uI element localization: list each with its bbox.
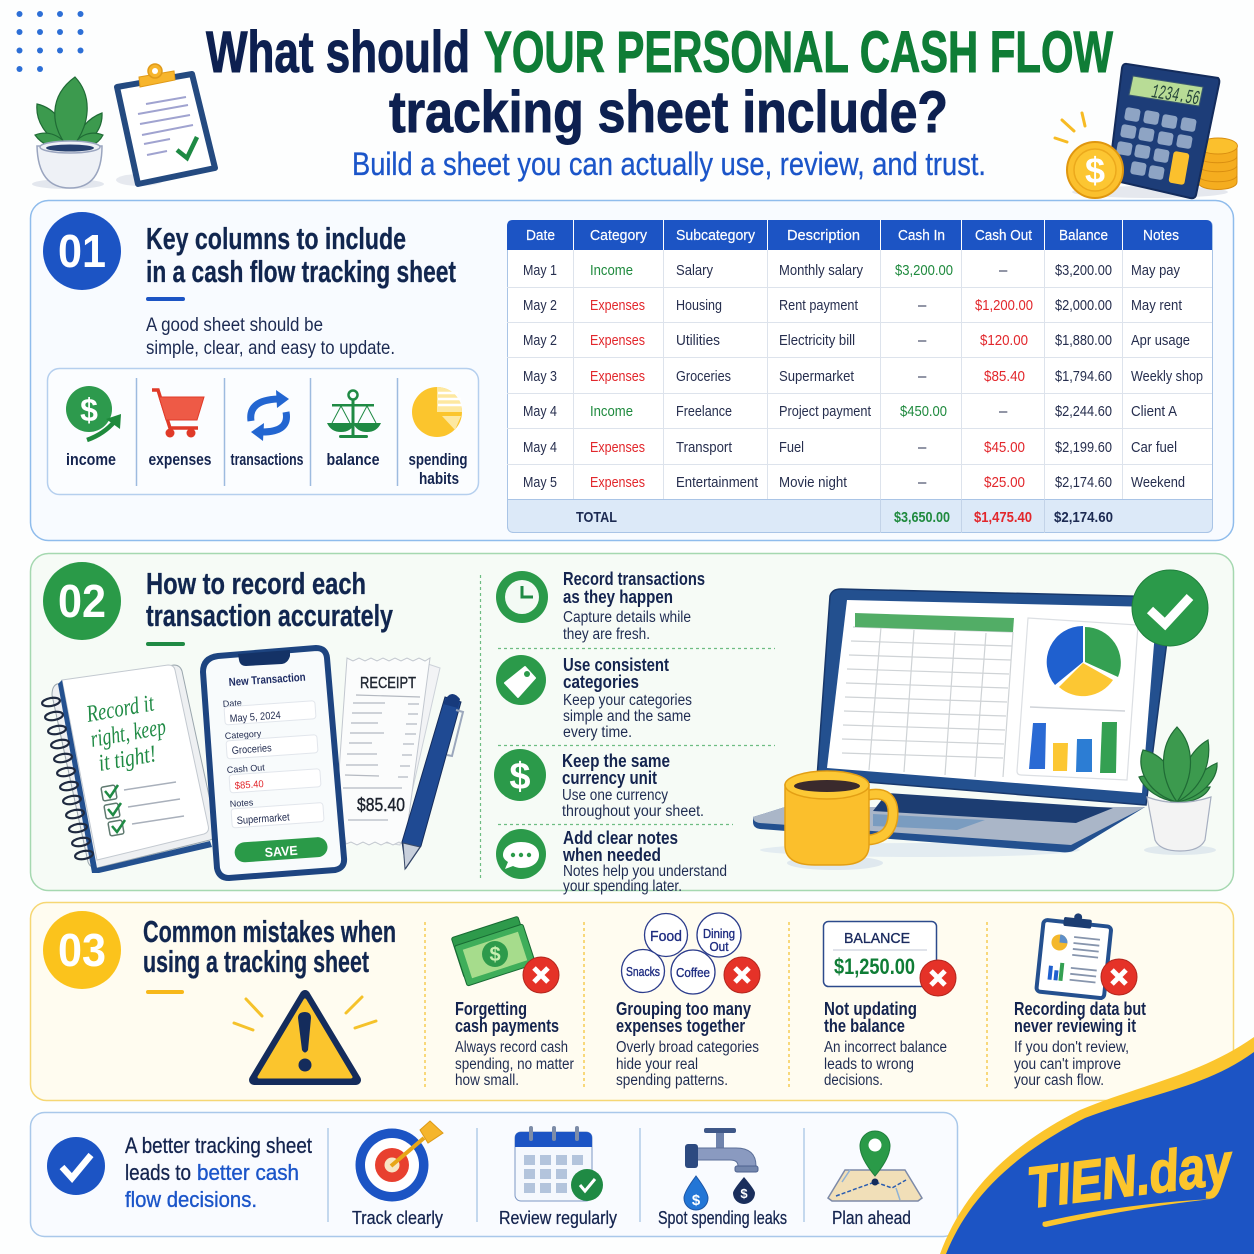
takeaway text: A better tracking sheet [125,1133,312,1158]
tip: same currency [494,749,704,820]
table row May 5: $2,174.60 [1055,474,1112,491]
icon: category bubbles: Dining [703,927,735,941]
handwritten note [84,690,168,777]
icon: calculator and coins [1055,64,1238,198]
icon: cash with red x: $ [489,944,501,966]
table row May 3: Groceries [676,368,731,385]
benefit: plan ahead: Plan ahead [832,1208,911,1228]
icon: clock [496,571,548,623]
takeaway text [125,1133,312,1212]
table row May 3 [523,368,1203,385]
mistake 2: grouping expenses: Overly broad categories [616,1039,759,1056]
illustration: phone form: Groceries [231,742,272,757]
tip: consistent categories: every time. [563,724,632,741]
table row May 4 transport [523,439,1177,456]
illustration: laptop with dashboard [753,589,1172,857]
table header: Description [787,227,860,244]
illustration: phone form [203,648,344,878]
mistake 3: not updating balance: decisions. [824,1072,883,1089]
mistake 1: forgetting cash payments: spending, no matter [455,1056,574,1073]
table row May 1: Salary [676,262,713,279]
title: What should [206,20,470,85]
icon: clipboard with checkmark [116,64,215,186]
icon: cash with red x [451,916,559,993]
table row May 4 freelance: Freelance [676,403,732,420]
illustration: phone form: $85.40 [234,779,265,792]
label: balance: balance [326,450,380,469]
tip: consistent categories: simple and the same [563,708,691,725]
illustration: phone form: Supermarket [236,811,290,827]
table row May 2 utilities: Utilities [676,332,720,349]
tip: same currency: currency unit [562,768,657,788]
table row May 2 utilities: Expenses [590,332,645,349]
icon: category bubbles [622,913,760,994]
heading: record transactions: transaction accurately [146,598,394,633]
table row May 5 [523,474,1185,491]
benefit: track clearly: Track clearly [352,1208,443,1228]
icon: spending habits pie [412,387,462,437]
benefit: spot spending leaks [658,1128,787,1228]
table row May 3: Expenses [590,368,645,385]
heading: record transactions [146,566,394,646]
table header: Cash In [898,227,945,244]
illustration: phone form: Date [222,698,242,709]
table row May 2 housing: Rent payment [779,297,859,314]
label: spending habits: habits [419,469,459,488]
illustration: phone form: May 5, 2024 [229,709,281,725]
table total row: TOTAL [576,509,617,526]
heading: common mistakes: using a tracking sheet [143,944,369,979]
icon: warning triangle [234,995,376,1080]
table total row: $3,650.00 [894,509,950,526]
illustration: phone form: Cash Out [226,762,266,775]
table total row: $1,475.40 [974,509,1032,526]
icon: expenses cart [152,390,204,438]
number badge 03 [43,911,121,989]
icon: leaking faucet: $ [692,1192,701,1209]
takeaway text: flow decisions. [125,1187,257,1212]
table row May 4 transport: $45.00 [984,439,1025,456]
tip: same currency: throughout your sheet. [562,803,704,820]
icon: leaking faucet [684,1128,758,1210]
table row May 4 freelance: Income [590,403,633,420]
table row May 5: $25.00 [984,474,1025,491]
table row May 3: – [918,368,927,385]
table total row [508,499,1212,533]
table row May 3: Weekly shop [1131,368,1203,385]
icon: income [66,386,121,440]
tip: same currency: Keep the same [562,751,670,771]
intro text: simple, clear, and easy to update. [146,338,395,359]
tip: consistent categories [496,655,692,741]
tip: clear notes: Add clear notes [563,828,678,848]
icon: transactions arrows [251,390,289,441]
mistake 3: not updating balance: An incorrect balance [824,1039,947,1056]
table row May 4 freelance: $2,244.60 [1055,403,1112,420]
mistake 4: never reviewing: your cash flow. [1014,1072,1104,1089]
table row May 3: $1,794.60 [1055,368,1112,385]
tip: clear notes: your spending later. [563,878,682,895]
table row May 4 freelance: $450.00 [900,403,947,420]
tip: consistent categories: Keep your categories [563,692,692,709]
icon: category bubbles: Food [650,928,682,945]
mistake 1: forgetting cash payments: Forgetting [455,999,527,1019]
table row May 1: – [999,262,1008,279]
number badge 01 [43,212,121,290]
heading: common mistakes [143,914,396,994]
illustration: spiral notebook [41,665,216,873]
icon: dollar disc: $ [509,756,531,798]
table row May 1 [523,262,1180,279]
mistake 2: grouping expenses: spending patterns. [616,1072,728,1089]
intro text [146,315,395,359]
panel: five key items [48,368,478,494]
table row May 5: May 5 [523,474,557,491]
icon: category bubbles: Snacks [626,964,660,979]
illustration: receipt [337,658,440,845]
table row May 2 housing [523,297,1183,314]
table row May 2 utilities: Apr usage [1131,332,1190,349]
table row May 4 transport: Transport [676,439,733,456]
mistake 4: never reviewing [1014,910,1146,1089]
table: cash flow sheet [507,220,1212,533]
table header: Subcategory [676,227,755,244]
number badge 03: 03 [58,924,106,976]
mistake 1: forgetting cash payments: how small. [455,1072,519,1089]
panel: key columns [30,200,1234,540]
mistake 4: never reviewing: you can't improve [1014,1056,1121,1073]
mistake 4: never reviewing: If you don't review, [1014,1039,1129,1056]
illustration: receipt: RECEIPT [360,675,416,692]
mistake 2: grouping expenses: Grouping too many [616,999,751,1019]
benefit: review regularly: Review regularly [499,1208,617,1228]
benefit: track clearly [352,1121,443,1228]
table row May 4 transport: May 4 [523,439,557,456]
intro text: A good sheet should be [146,315,323,336]
table row May 3: May 3 [523,368,557,385]
table row May 2 housing: Housing [676,297,722,314]
table header: Date [526,227,555,244]
table row May 2 housing: May 2 [523,297,557,314]
tip: clear notes: Notes help you understand [563,863,727,880]
table row May 5: Weekend [1131,474,1185,491]
table row May 4 freelance: Project payment [779,403,872,420]
takeaway text: better cash [197,1160,299,1185]
subtitle: Build a sheet you can actually use, review, and trust. [352,146,986,182]
icon: category bubbles: Coffee [676,965,710,980]
table row May 1: $3,200.00 [1055,262,1112,279]
icon: report clipboard [1036,910,1137,998]
table row May 4 freelance [523,403,1177,420]
table row May 2 housing: $1,200.00 [975,297,1033,314]
tip: record as they happen: Capture details while [563,609,691,626]
heading: common mistakes: Common mistakes when [143,914,396,949]
icon: dollar disc [494,749,546,801]
icon: balance scale [327,390,381,438]
icon: balance card [824,922,956,996]
table row May 4 freelance: May 4 [523,403,557,420]
number badge 02: 02 [58,575,106,627]
icon: balance card: $1,250.00 [834,954,915,979]
tip: consistent categories: Use consistent [563,655,669,675]
icon: potted plant top left [32,77,104,189]
illustration: phone form: SAVE [264,843,298,860]
tip: consistent categories: categories [563,672,639,692]
table header: Cash Out [975,227,1033,244]
mistake 4: never reviewing: Recording data but [1014,999,1146,1019]
table row May 2 utilities: May 2 [523,332,557,349]
table row May 3: Supermarket [779,368,855,385]
icon: green check badge [1132,570,1208,646]
table row May 4 transport: $2,199.60 [1055,439,1112,456]
mistake 1: forgetting cash payments: Always record cash [455,1039,568,1056]
icon: blue check [47,1137,105,1195]
takeaway text: leads to [125,1160,191,1185]
table row May 2 utilities: – [918,332,927,349]
table header: Category [590,227,647,244]
table row May 2 housing: May rent [1131,297,1183,314]
mistake 3: not updating balance: leads to wrong [824,1056,914,1073]
panel: record accurately [30,554,1234,895]
brand banner: TIEN.day [940,1037,1254,1254]
heading: record transactions: How to record each [146,566,366,601]
table row May 4 transport: Car fuel [1131,439,1177,456]
panel: better decisions footer [30,1112,958,1236]
mistake 2: grouping expenses: expenses together [616,1016,745,1036]
mistake 1: forgetting cash payments [451,916,574,1089]
table row May 5: Movie night [779,474,848,491]
mistake 4: never reviewing: never reviewing it [1014,1016,1136,1036]
table row May 2 utilities: Electricity bill [779,332,855,349]
table row May 2 utilities [523,332,1190,349]
label: spending habits: spending [408,450,468,469]
label: spending habits [408,450,468,488]
heading: key columns [146,221,456,301]
tip: record as they happen: they are fresh. [563,626,650,643]
tip: same currency: Use one currency [562,787,668,804]
table row May 5: Expenses [590,474,645,491]
label: income: income [66,450,116,469]
icon: map and pin [828,1131,922,1201]
benefit: review regularly [499,1128,617,1228]
benefit: plan ahead [828,1131,922,1228]
table row May 2 housing: – [918,297,927,314]
label: expenses: expenses [148,450,212,469]
benefit: spot spending leaks: Spot spending leaks [658,1208,787,1228]
icon: leaking faucet: $ [740,1186,748,1201]
table row May 1: Monthly salary [779,262,863,279]
icon: calculator and coins: $ [1085,150,1105,191]
tip: clear notes [496,828,727,895]
tip: clear notes: when needed [562,845,661,865]
illustration: phone form: Notes [229,797,254,809]
table row May 1: $3,200.00 [895,262,953,279]
icon: category bubbles: Out [710,940,729,954]
illustration: phone form: Category [224,728,262,741]
table row May 1: May pay [1131,262,1180,279]
tip: record as they happen: Record transactions [563,569,705,589]
table row May 2 housing: Expenses [590,297,645,314]
label: transactions: transactions [230,450,304,469]
table row May 1: May 1 [523,262,557,279]
icon: tag [496,655,546,705]
table row May 4 freelance: – [999,403,1008,420]
icon: chat bubble [496,829,546,879]
table header [507,220,1212,250]
handwritten note: Record it [84,690,157,728]
illustration: coffee mug [785,771,893,870]
title [206,20,1113,145]
table row May 2 housing: $2,000.00 [1055,297,1112,314]
illustration: pen [402,694,463,869]
table row May 5: Entertainment [676,474,759,491]
heading: key columns: Key columns to include [146,221,406,256]
illustration: receipt: $85.40 [357,795,405,815]
table row May 2 utilities: $120.00 [980,332,1028,349]
tip: record as they happen [496,569,705,643]
mistake 3: not updating balance: the balance [824,1016,905,1036]
table row May 1: Income [590,262,633,279]
title: tracking sheet include? [389,80,948,145]
table row May 2 utilities: $1,880.00 [1055,332,1112,349]
mistake 2: grouping expenses: hide your real [616,1056,698,1073]
icon: balance card: BALANCE [844,930,910,947]
spreadsheet on screen [842,613,1014,777]
tip: record as they happen: as they happen [563,587,673,607]
illustration: plant right [1139,727,1217,855]
mistake 1: forgetting cash payments: cash payments [455,1016,559,1036]
icon: calendar [515,1128,603,1201]
icon: calculator and coins: 1234.56 [1150,81,1201,111]
number badge 01: 01 [58,225,106,277]
dashboard charts on screen [1017,618,1138,780]
icon: target [356,1121,443,1202]
mistake 3: not updating balance [824,922,956,1089]
heading: key columns: in a cash flow tracking sheet [146,254,456,289]
table total row: $2,174.60 [1054,509,1113,526]
table row May 3: $85.40 [984,368,1025,385]
handwritten note: it tight! [97,741,158,777]
table row May 4 transport: Fuel [779,439,804,456]
table header: Balance [1059,227,1108,244]
handwritten note: right, keep [89,714,168,753]
table header: Notes [1143,227,1179,244]
icon: income: $ [80,392,98,428]
mistake 3: not updating balance: Not updating [824,999,917,1019]
panel: common mistakes [30,902,1234,1100]
table row May 4 transport: – [918,439,927,456]
mistake 2: grouping expenses [616,913,760,1089]
table row May 4 transport: Expenses [590,439,645,456]
number badge 02 [43,562,121,640]
table row May 4 freelance: Client A [1131,403,1177,420]
table row May 5: – [918,474,927,491]
illustration: phone form: New Transaction [228,672,306,689]
decorative dot grid [16,11,84,72]
